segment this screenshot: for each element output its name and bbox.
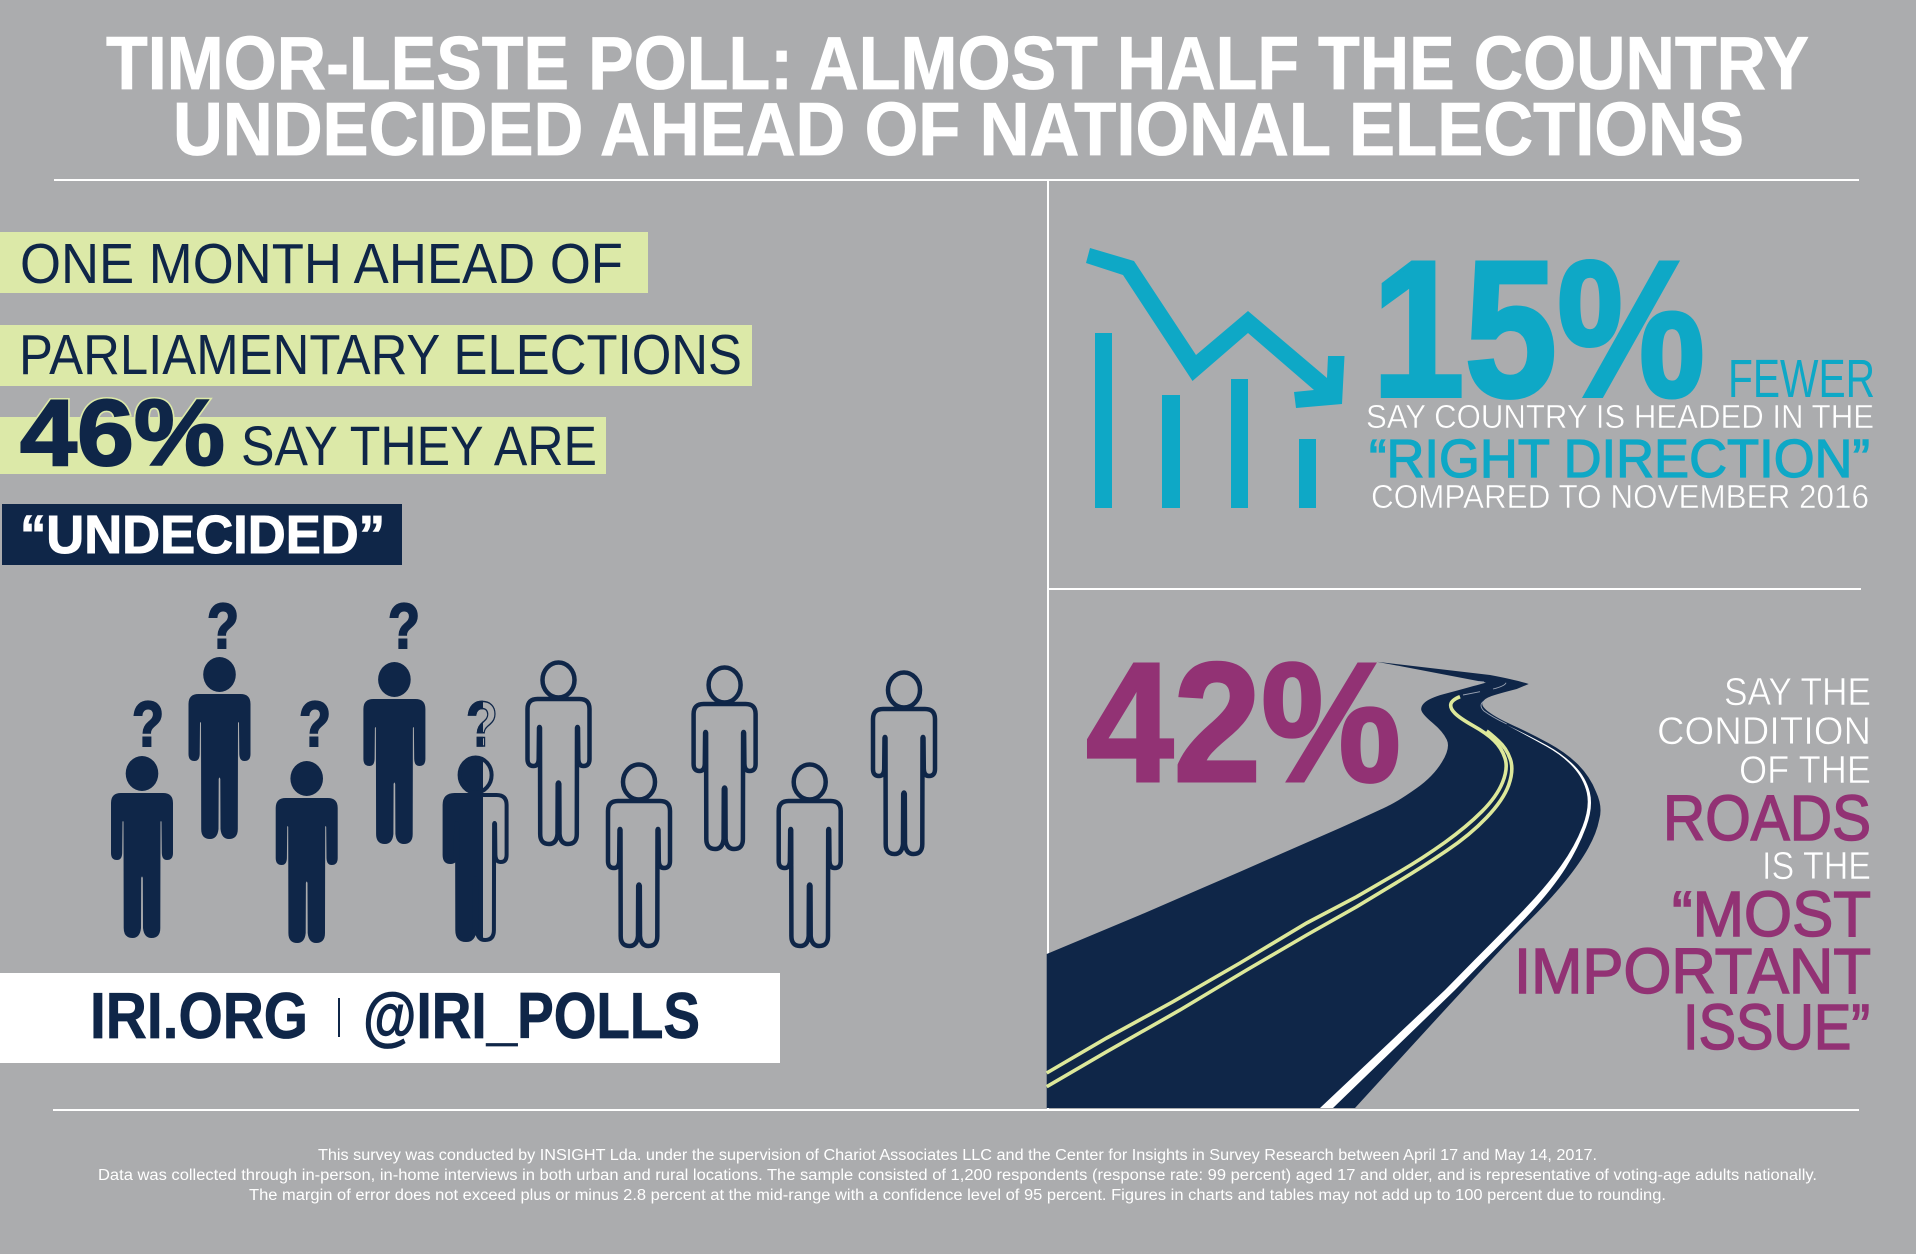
stat: 42%: 42% [1086, 628, 1401, 818]
stat: 15% fewer [1366, 221, 1875, 515]
distant road markings [1463, 682, 1507, 724]
undecided person 2: ? [207, 590, 239, 662]
highlight: 46% say they are [0, 380, 606, 485]
highlight: undecided: “UNDECIDED” [20, 505, 385, 565]
text: condition of roads: ROADS [1663, 782, 1871, 854]
half-filled person [445, 688, 507, 940]
footnote: The margin of error does not exceed plus or minus 2.8 percent at the mid-range with a confidence level of 95 percent. Figures in charts and tables may not add up to 100 percent due to rounding. [249, 1187, 1666, 1204]
icon: declining chart with arrow [1086, 248, 1344, 508]
text: condition of roads: IS THE [1762, 845, 1871, 888]
people pictogram [111, 590, 935, 946]
highlight: parliamentary elections: PARLIAMENTARY ELECTIONS [19, 323, 742, 387]
road illustration [1047, 662, 1601, 1108]
highlight: one month ahead of: ONE MONTH AHEAD OF [20, 232, 623, 296]
stat: 15% fewer: SAY COUNTRY IS HEADED IN THE [1366, 398, 1874, 435]
road centre lines [1047, 697, 1512, 1087]
half-filled person: ? [466, 688, 498, 760]
highlight: 46% say they are: 46% [20, 380, 225, 485]
undecided person 3: ? [299, 688, 331, 760]
website and handle bar [0, 973, 780, 1063]
text: condition of roads [1514, 671, 1871, 1063]
title [106, 21, 1809, 171]
highlight: 46% say they are: 46% [20, 380, 225, 485]
text: condition of roads: SAY THE [1724, 671, 1871, 714]
half-filled person: ? [466, 688, 498, 760]
undecided person 4: ? [388, 590, 420, 662]
undecided person 4 [363, 590, 425, 844]
text: condition of roads: ISSUE” [1683, 991, 1870, 1063]
stat: 15% fewer: COMPARED TO NOVEMBER 2016 [1371, 478, 1869, 515]
website and handle bar: @IRI_POLLS [363, 979, 700, 1052]
text: condition of roads: CONDITION [1657, 710, 1871, 753]
website and handle bar: IRI.ORG [90, 979, 308, 1052]
undecided person 1: ? [132, 688, 164, 760]
text: condition of roads: OF THE [1739, 749, 1871, 792]
decided people outlines [528, 662, 935, 946]
undecided person 1 [111, 688, 173, 938]
undecided person 2 [188, 590, 250, 839]
undecided person 3 [276, 688, 338, 943]
footnote: This survey was conducted by INSIGHT Lda. under the supervision of Chariot Associates LLC and the Center for Insights in Survey Research between April 17 and May 14, 2017. [318, 1147, 1597, 1164]
footnote: Data was collected through in-person, in-home interviews in both urban and rural locations. The sample consisted of 1,200 respondents (response rate: 99 percent) aged 17 and older, and is representative of voting-age adults nationally. [98, 1167, 1817, 1184]
highlight: 46% say they are: SAY THEY ARE [241, 414, 597, 477]
stat: 15% fewer: “RIGHT DIRECTION” [1369, 429, 1870, 489]
text: condition of roads: “MOST [1672, 878, 1871, 950]
stat: 15% fewer: 15% [1372, 221, 1705, 438]
text: condition of roads: IMPORTANT [1514, 935, 1871, 1007]
road edge line [1320, 725, 1591, 1108]
footnote [98, 1147, 1817, 1204]
title: UNDECIDED AHEAD OF NATIONAL ELECTIONS [173, 87, 1744, 171]
